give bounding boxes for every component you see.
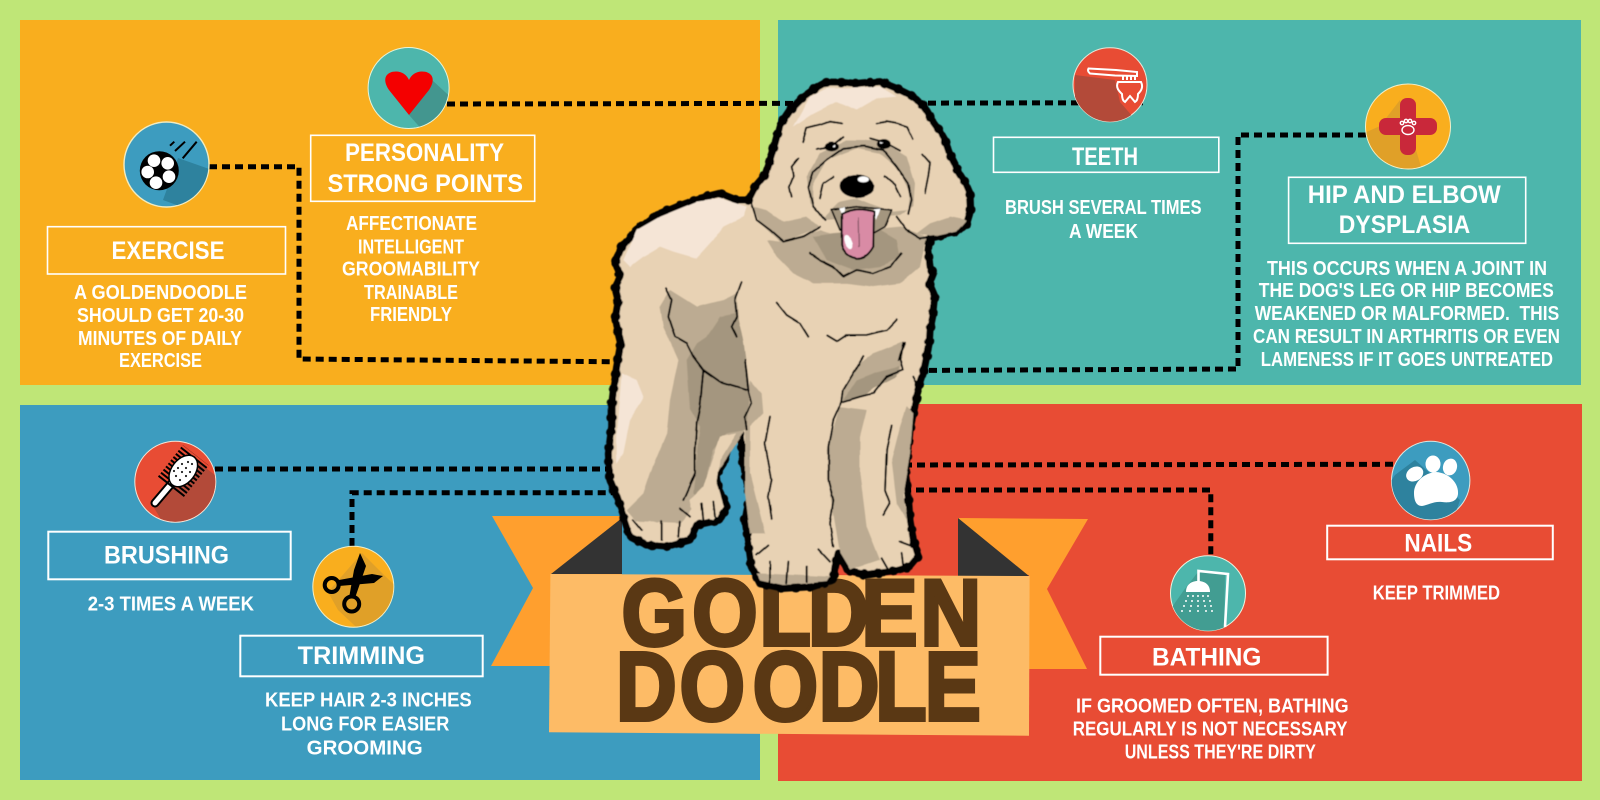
body text: IF GROOMED OFTEN, BATHING bbox=[1076, 696, 1349, 718]
center paw shade bbox=[757, 573, 830, 585]
heading: TEETH bbox=[1072, 143, 1138, 171]
heading: EXERCISE bbox=[112, 237, 224, 265]
heading: PERSONALITY bbox=[345, 139, 504, 167]
body text bbox=[1005, 197, 1202, 243]
tongue highlight bbox=[842, 234, 855, 251]
body text: A WEEK bbox=[1069, 221, 1138, 243]
panel: grooming blue bbox=[20, 405, 760, 780]
body text: GROOMABILITY bbox=[342, 259, 481, 281]
body text: TRAINABLE bbox=[364, 282, 458, 304]
heading: BATHING bbox=[1152, 644, 1261, 672]
section: exercise bbox=[48, 122, 286, 372]
icon: shower bbox=[1170, 556, 1246, 632]
body text: THIS OCCURS WHEN A JOINT IN bbox=[1267, 258, 1547, 280]
heading: TRIMMING bbox=[298, 642, 425, 670]
body text bbox=[1073, 696, 1349, 763]
body text: GROOMING bbox=[307, 737, 423, 759]
body text: BRUSH SEVERAL TIMES bbox=[1005, 197, 1202, 219]
icon: soccer ball bbox=[123, 121, 210, 208]
dog silhouette bbox=[608, 82, 971, 588]
icon: medical cross with paw bbox=[1365, 84, 1451, 170]
body text bbox=[1253, 258, 1560, 371]
body text: FRIENDLY bbox=[370, 304, 453, 326]
ribbon right fold bbox=[958, 518, 1029, 576]
tongue crease bbox=[857, 217, 861, 247]
heading: NAILS bbox=[1404, 530, 1472, 558]
heading box bbox=[994, 137, 1219, 172]
body text bbox=[342, 213, 481, 326]
section: personality bbox=[311, 48, 535, 326]
mouth bbox=[832, 207, 892, 233]
title: DOODLE bbox=[616, 633, 981, 741]
body text: A GOLDENDOODLE bbox=[74, 282, 247, 304]
heading: HIP AND ELBOW bbox=[1308, 181, 1501, 209]
heading bbox=[328, 139, 523, 198]
section: trimming bbox=[240, 546, 483, 759]
section: hip and elbow dysplasia bbox=[1253, 84, 1560, 371]
icon: toothbrush and tooth bbox=[1073, 48, 1147, 125]
icon: paw print bbox=[1391, 440, 1470, 520]
back paw bbox=[690, 433, 737, 520]
ribbon left tail bbox=[491, 516, 622, 666]
body text: KEEP HAIR 2-3 INCHES bbox=[265, 689, 472, 711]
connector: hip dysplasia to dog bbox=[900, 135, 1366, 370]
body text bbox=[74, 282, 247, 372]
section: brushing bbox=[48, 441, 291, 616]
connector: nails to dog bbox=[890, 462, 1393, 468]
heading box bbox=[1100, 637, 1328, 675]
illustration: goldendoodle dog bbox=[608, 82, 971, 588]
coat mid shading bbox=[627, 140, 967, 570]
body text: 2-3 TIMES A WEEK bbox=[88, 594, 255, 616]
coat highlights bbox=[617, 87, 897, 463]
body text: UNLESS THEY'RE DIRTY bbox=[1125, 741, 1316, 763]
ribbon banner bbox=[491, 516, 1088, 736]
panel: personality and exercise bbox=[20, 20, 760, 385]
body text bbox=[265, 689, 472, 759]
eyes bbox=[824, 139, 891, 151]
ribbon left fold bbox=[551, 518, 622, 574]
fur lines bbox=[633, 122, 933, 583]
front paw toes bbox=[631, 521, 691, 541]
ribbon right tail bbox=[958, 518, 1088, 669]
body text: EXERCISE bbox=[119, 350, 202, 372]
heading box bbox=[311, 135, 535, 201]
heading box bbox=[48, 532, 291, 579]
nose bbox=[840, 174, 874, 198]
heading: BRUSHING bbox=[104, 542, 229, 570]
heading box bbox=[48, 227, 286, 274]
heading: STRONG POINTS bbox=[328, 170, 523, 198]
body text: SHOULD GET 20-30 bbox=[77, 305, 244, 327]
tongue bbox=[842, 209, 874, 258]
section: teeth bbox=[994, 48, 1219, 243]
body text: WEAKENED OR MALFORMED. THIS bbox=[1255, 303, 1559, 325]
ribbon main plate bbox=[549, 574, 1030, 736]
body text: KEEP TRIMMED bbox=[1373, 583, 1500, 605]
coat dark shading bbox=[687, 230, 900, 500]
heading bbox=[1308, 181, 1501, 239]
dog outline scallops bbox=[608, 82, 971, 588]
section: nails bbox=[1327, 441, 1553, 605]
connector: trimming to dog bbox=[352, 493, 640, 546]
section: bathing bbox=[1073, 556, 1349, 763]
heading: DYSPLASIA bbox=[1339, 211, 1470, 239]
connector: personality to teeth bbox=[447, 103, 1143, 104]
panel: grooming red bbox=[778, 404, 1582, 781]
title bbox=[616, 560, 981, 741]
connector: bathing to dog bbox=[890, 490, 1211, 556]
teeth bbox=[839, 207, 880, 220]
title: GOLDEN bbox=[622, 560, 981, 665]
icon: hair brush bbox=[134, 440, 216, 523]
connector: brushing to dog bbox=[215, 466, 640, 472]
icon: heart bbox=[368, 47, 450, 129]
connector: exercise to dog bbox=[209, 167, 640, 362]
muzzle bbox=[813, 148, 910, 218]
body text: AFFECTIONATE bbox=[346, 213, 477, 235]
panel: health bbox=[778, 20, 1581, 385]
body text: LONG FOR EASIER bbox=[281, 713, 450, 735]
heading box bbox=[1327, 526, 1553, 559]
heading box bbox=[1289, 177, 1526, 243]
body text: INTELLIGENT bbox=[358, 237, 464, 259]
icon: scissors bbox=[312, 546, 394, 628]
body text: THE DOG'S LEG OR HIP BECOMES bbox=[1259, 280, 1554, 302]
body text: MINUTES OF DAILY bbox=[78, 328, 243, 350]
heading box bbox=[240, 636, 483, 676]
body text: REGULARLY IS NOT NECESSARY bbox=[1073, 718, 1348, 740]
body text: LAMENESS IF IT GOES UNTREATED bbox=[1261, 349, 1553, 371]
